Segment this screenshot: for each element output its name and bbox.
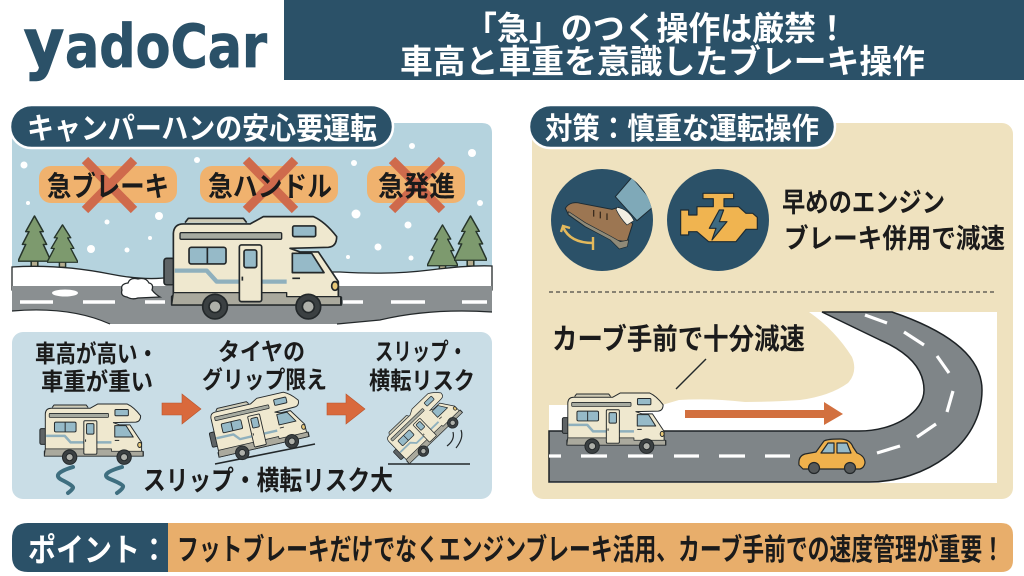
camper van — [164, 217, 341, 319]
camper on road — [562, 393, 666, 453]
engine brake text: ブレーキ併用で減速 — [784, 223, 1005, 254]
curve road diagram — [549, 312, 997, 483]
snow bank — [12, 266, 492, 290]
road curve — [549, 312, 982, 482]
step 1 text: 車重が重い — [41, 368, 153, 396]
title banner — [284, 0, 1024, 83]
panel: countermeasure — [532, 123, 1013, 499]
yellow car — [799, 439, 865, 474]
step 2 text — [202, 339, 327, 394]
panel: risk chain — [12, 332, 492, 499]
icon: foot on pedal — [551, 169, 655, 271]
icon: engine warning — [667, 169, 769, 271]
tipping camper — [381, 385, 470, 470]
logo: adoCar — [65, 12, 267, 82]
warning label: 急ハンドル — [200, 160, 338, 210]
warning label: 急ブレーキ: 急ブレーキ — [47, 170, 169, 202]
exhaust cloud — [122, 278, 160, 299]
callout text: カーブ手前で十分減速 — [552, 322, 805, 356]
warning label: 急発進 — [367, 160, 465, 210]
step 1 text — [35, 340, 158, 396]
title banner: 「急」のつく操作は厳禁！ — [465, 2, 848, 50]
step 2 text: グリップ限え — [202, 366, 327, 394]
engine brake text — [782, 188, 1005, 254]
logo — [24, 5, 267, 82]
callout leader — [676, 359, 706, 389]
road — [12, 286, 492, 324]
step 3 text — [369, 339, 475, 395]
warning label: 急ハンドル: 急ハンドル — [208, 171, 332, 202]
panel: winter road scene — [12, 123, 492, 324]
arrow 2 — [327, 394, 365, 424]
heading: left section: キャンパーハンの安心要運転 — [27, 113, 377, 146]
warning label: 急ブレーキ — [39, 160, 177, 210]
title banner: 車高と車重を意識したブレーキ操作 — [400, 35, 925, 83]
trees left — [18, 216, 78, 267]
risk summary text: スリップ・横転リスク大 — [143, 466, 393, 496]
engine brake text: 早めのエンジン — [782, 188, 945, 218]
point bar: ポイント： — [28, 525, 168, 571]
step 2 text: タイヤの — [218, 339, 305, 366]
arrow 1 — [162, 394, 201, 424]
step 1 text: 車高が高い・ — [35, 340, 158, 368]
trees right — [427, 216, 487, 271]
logo: y — [24, 5, 64, 82]
step 3 text: 横転リスク — [369, 368, 475, 395]
camper on slope — [204, 389, 315, 466]
step 3 text: スリップ・ — [375, 339, 467, 366]
heading: right section: 対策：慎重な運転操作 — [545, 104, 819, 148]
camper with tire squiggles — [40, 404, 143, 493]
snow flakes — [20, 143, 483, 260]
warning label: 急発進: 急発進 — [378, 171, 455, 202]
speed arrow — [685, 402, 843, 425]
